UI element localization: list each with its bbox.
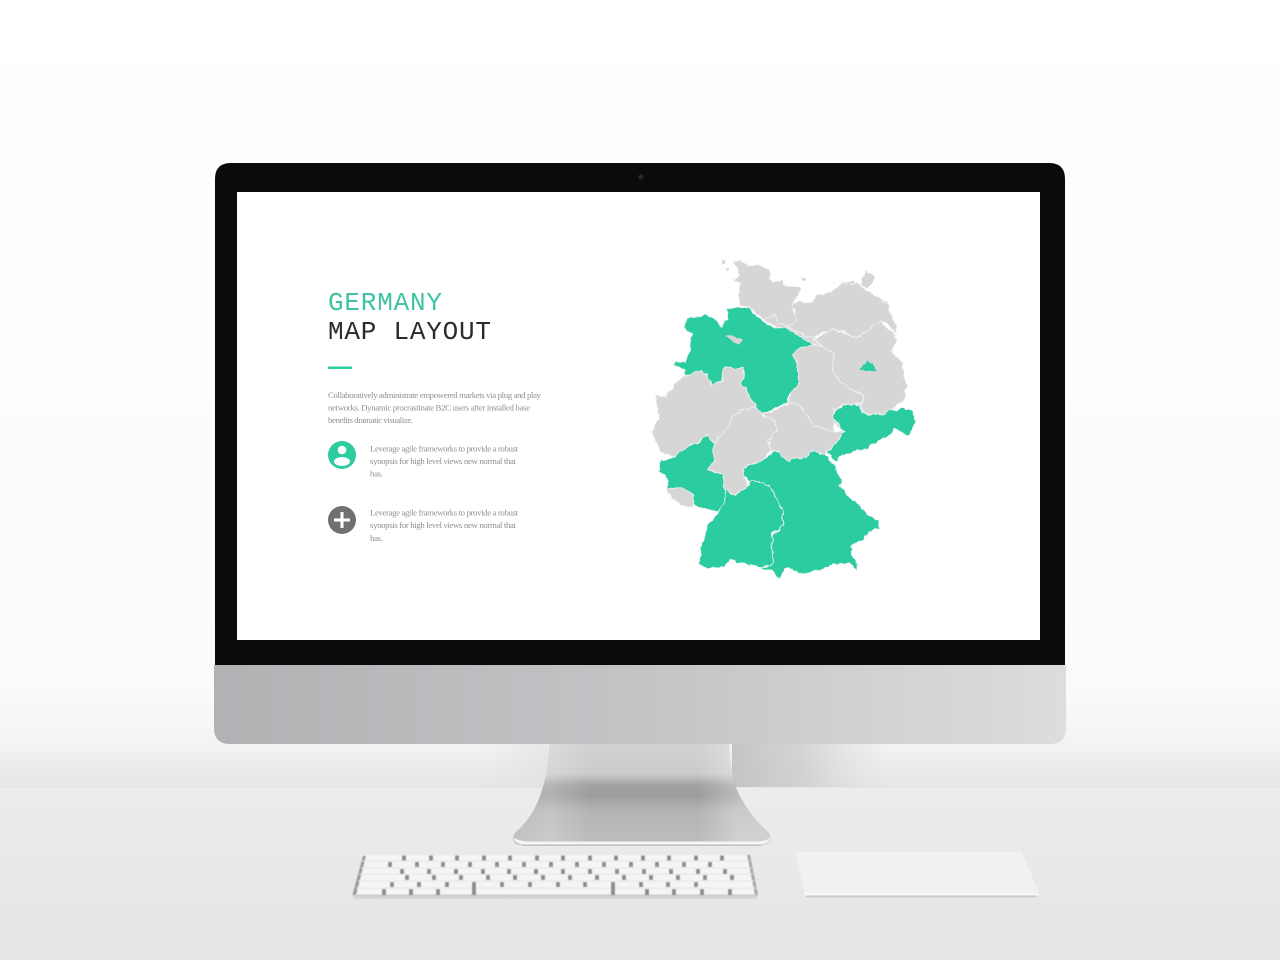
feature text: has. — [370, 468, 383, 478]
feature text — [370, 444, 519, 478]
region: Brandenburg — [813, 322, 907, 415]
region: Lower Saxony — [675, 308, 813, 415]
region: Hesse — [708, 407, 777, 495]
feature text — [370, 508, 519, 543]
feature item: person — [328, 441, 519, 478]
map of Germany — [652, 259, 915, 578]
keyboard — [352, 855, 758, 899]
feature text: Leverage agile frameworks to provide a robust — [370, 444, 519, 454]
islands — [723, 259, 890, 308]
heading: GERMANY — [328, 288, 442, 318]
region: Saxony-Anhalt — [788, 343, 863, 432]
feature text: synopsis for high level views new normal that — [370, 456, 517, 466]
region: Rhineland-Palatinate — [658, 435, 726, 512]
region: Mecklenburg-Vorpommern — [788, 283, 897, 338]
icon: plus — [328, 506, 356, 534]
region: Saarland — [667, 487, 693, 507]
region: Schleswig-Holstein — [733, 262, 801, 327]
intro paragraph: networks. Dynamic procrastinate B2C users after installed base — [328, 402, 530, 412]
region: Baden-Wurttemberg — [699, 480, 783, 568]
feature item: plus — [328, 506, 519, 543]
heading underline — [328, 366, 352, 369]
region: Thuringia — [762, 403, 845, 462]
monitor bezel — [215, 163, 1065, 665]
monitor stand — [513, 744, 771, 846]
region: Bremen — [727, 335, 742, 344]
intro paragraph — [328, 390, 542, 425]
heading: MAP LAYOUT — [328, 317, 491, 347]
feature text: has. — [370, 533, 383, 543]
region: North Rhine-Westphalia — [652, 367, 758, 457]
feature text: synopsis for high level views new normal that — [370, 520, 517, 530]
intro paragraph: benefits dramatic visualize. — [328, 415, 413, 425]
monitor — [214, 163, 1066, 846]
intro paragraph: Collaboratively administrate empowered markets via plug and play — [328, 390, 542, 400]
feature text: Leverage agile frameworks to provide a robust — [370, 508, 519, 518]
monitor chin — [214, 665, 1066, 744]
webcam — [638, 174, 644, 180]
region: Bavaria — [743, 450, 880, 578]
region: Saxony — [827, 403, 915, 462]
screen — [237, 192, 1040, 640]
icon: person — [328, 441, 356, 469]
heading — [328, 288, 491, 347]
region: Berlin — [860, 361, 877, 372]
trackpad — [797, 852, 1038, 897]
